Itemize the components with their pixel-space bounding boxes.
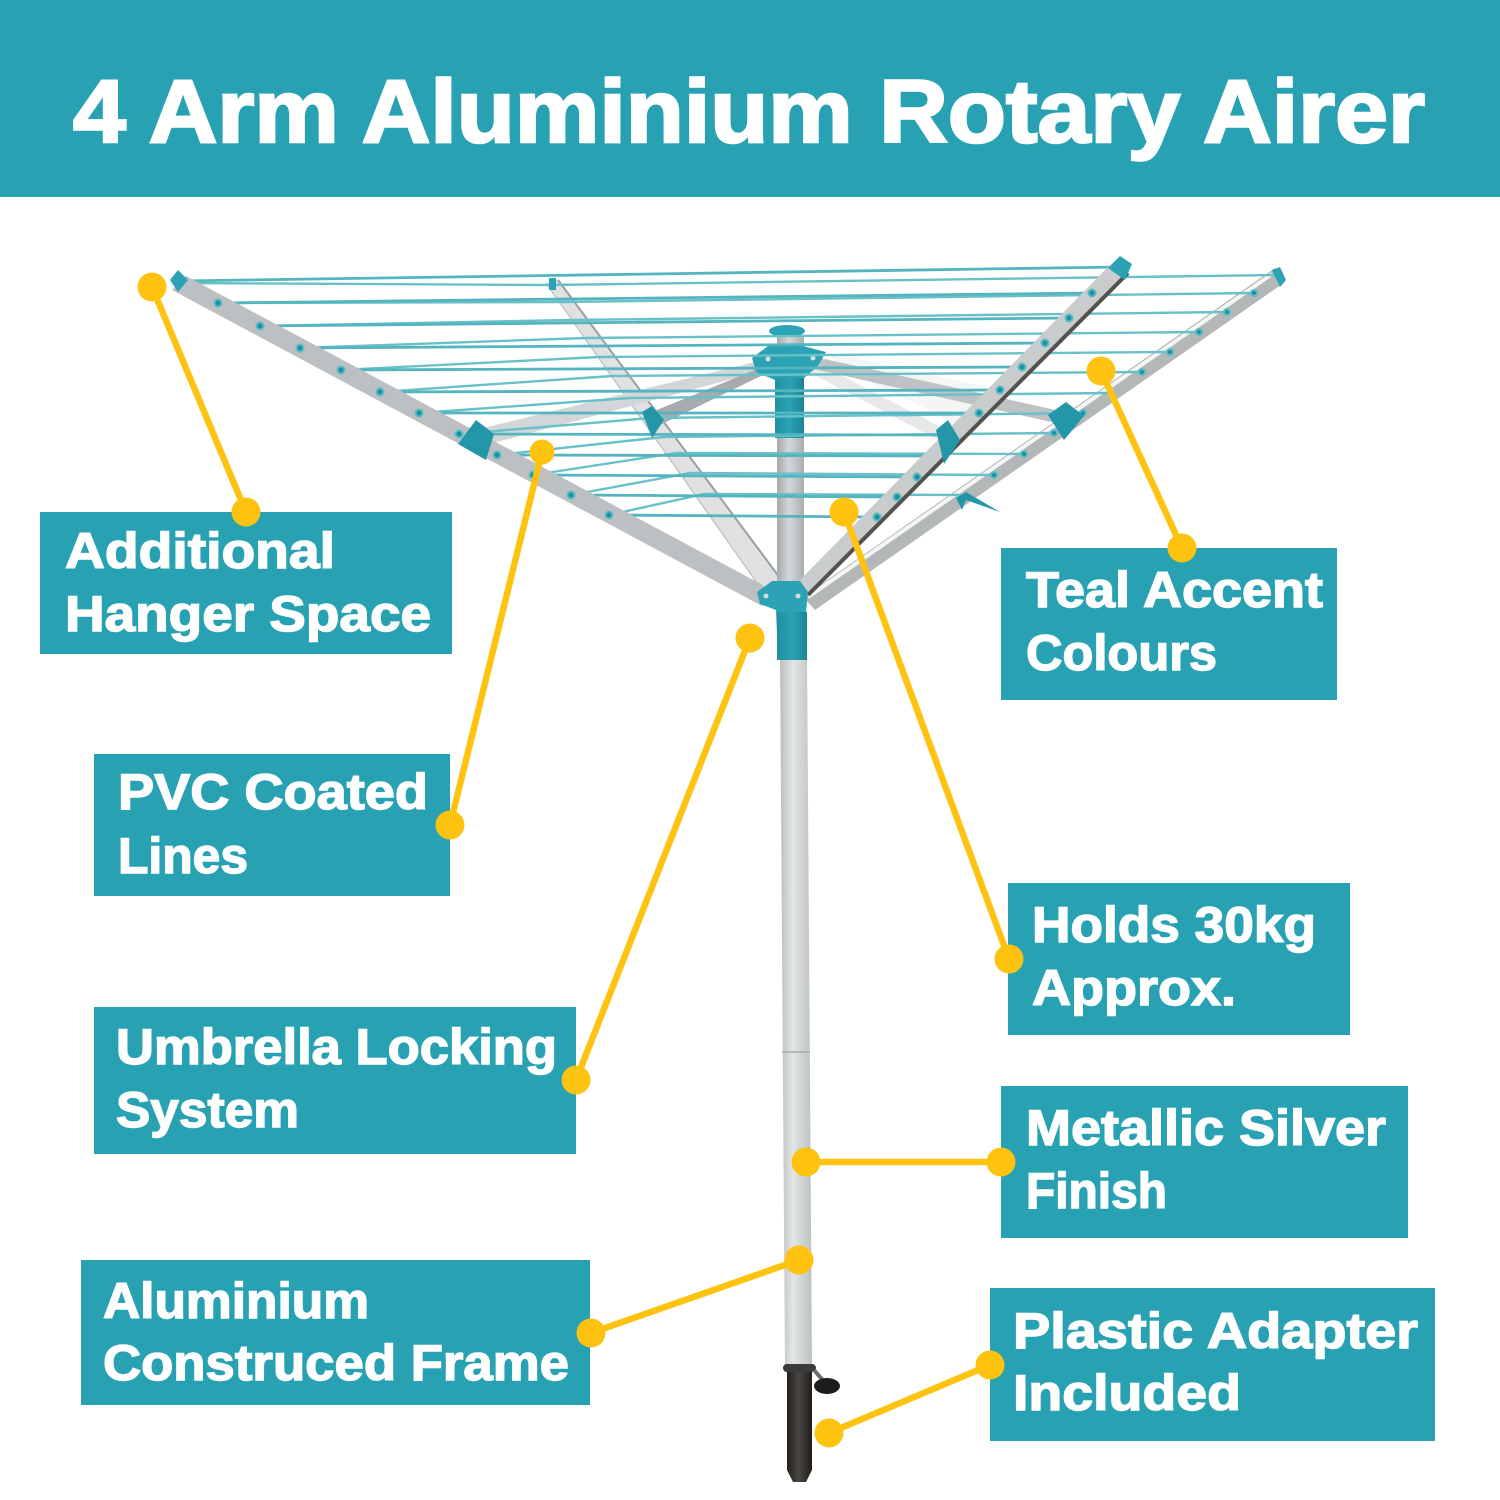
callout: Teal Accent Colours: Teal Accent xyxy=(1026,562,1323,618)
callout: Aluminium Construced Frame: Construced Frame xyxy=(103,1335,569,1391)
callout: PVC Coated Lines xyxy=(94,754,450,896)
callout: Umbrella Locking System xyxy=(94,1007,576,1154)
callout: Holds 30kg Approx. xyxy=(1008,883,1350,1035)
callout: Metallic Silver Finish: Finish xyxy=(1026,1163,1167,1219)
callout: Plastic Adapter Included: Included xyxy=(1013,1365,1241,1421)
left arm xyxy=(172,276,772,606)
callout: Umbrella Locking System: Umbrella Locking xyxy=(116,1019,557,1075)
rear arm xyxy=(546,279,780,590)
lower pole xyxy=(780,655,812,1370)
plastic ground adapter xyxy=(783,1364,840,1482)
callout: Additional Hanger Space: Additional xyxy=(65,523,335,579)
callout: Teal Accent Colours xyxy=(1001,548,1337,700)
leader: Holds 30kg xyxy=(830,498,1024,974)
callout: Metallic Silver Finish xyxy=(1001,1086,1408,1238)
callout: PVC Coated Lines: Lines xyxy=(118,828,248,884)
title banner xyxy=(0,0,1500,197)
title: 4 Arm Aluminium Rotary Airer xyxy=(73,61,1425,161)
callout: Teal Accent Colours: Colours xyxy=(1026,625,1217,681)
arm tip caps xyxy=(170,256,1286,292)
line pins xyxy=(214,290,1257,520)
shadow panel behind lines xyxy=(825,352,1010,425)
leader: Aluminium Construced Frame xyxy=(576,1246,814,1348)
leader: Metallic Silver Finish xyxy=(792,1148,1016,1176)
leader: PVC Coated Lines xyxy=(436,440,554,840)
leader: Umbrella Locking System xyxy=(562,624,764,1094)
rear PVC lines xyxy=(180,275,1279,515)
lower teal hub xyxy=(757,581,808,660)
product photo: rotary airer xyxy=(170,256,1286,1482)
callout: Plastic Adapter Included xyxy=(990,1288,1435,1441)
leader: Teal Accent Colours xyxy=(1086,356,1196,562)
upper pole xyxy=(769,325,805,605)
top teal hub xyxy=(752,346,826,438)
callout: Holds 30kg Approx.: Approx. xyxy=(1032,960,1236,1016)
callout: Aluminium Construced Frame xyxy=(81,1260,590,1405)
leader: Plastic Adapter Included xyxy=(814,1350,1004,1448)
callout: Metallic Silver Finish: Metallic Silver xyxy=(1026,1100,1386,1156)
callout: Holds 30kg Approx.: Holds 30kg xyxy=(1032,897,1316,953)
callout: Additional Hanger Space: Hanger Space xyxy=(65,586,431,642)
callout: Umbrella Locking System: System xyxy=(116,1082,299,1138)
front arm xyxy=(796,265,1128,595)
callout: Additional Hanger Space xyxy=(40,512,452,654)
inner struts xyxy=(475,358,1065,446)
front PVC lines xyxy=(180,267,1120,517)
leader: Additional Hanger Space xyxy=(138,272,260,526)
hinge brackets xyxy=(458,402,1084,464)
callout: PVC Coated Lines: PVC Coated xyxy=(118,764,428,820)
right arm xyxy=(803,268,1285,610)
callout: Plastic Adapter Included: Plastic Adapter xyxy=(1013,1303,1418,1359)
callout: Aluminium Construced Frame: Aluminium xyxy=(103,1273,369,1329)
pegging clip detail xyxy=(956,492,1000,512)
